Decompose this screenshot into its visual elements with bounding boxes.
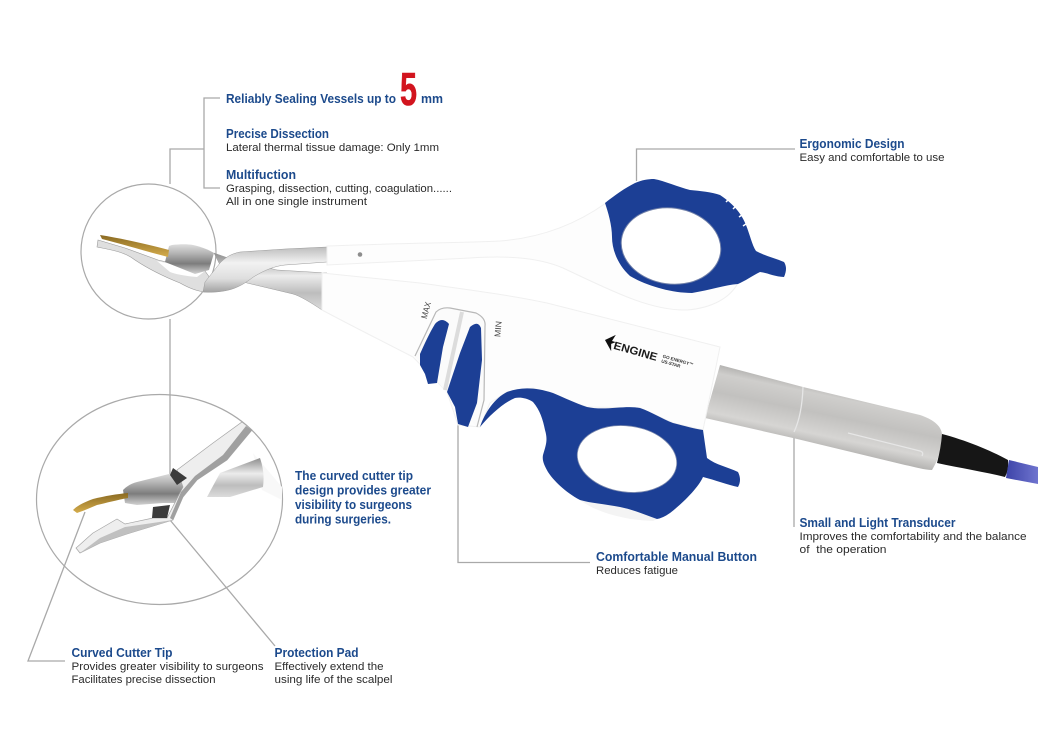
leader line: small circle to large circle bbox=[169, 319, 171, 474]
cutter sleeve bbox=[123, 473, 187, 505]
body line 2: of the operation bbox=[800, 544, 886, 556]
body: Reduces fatigue bbox=[596, 565, 678, 577]
rear shaft bbox=[207, 458, 264, 497]
line 1: The curved cutter tip bbox=[295, 468, 413, 483]
heading: Curved Cutter Tip bbox=[72, 645, 173, 660]
transducer body bbox=[705, 365, 942, 470]
crossing blade bbox=[203, 247, 327, 292]
arm shadow strip bbox=[170, 426, 252, 520]
body line 2: Facilitates precise dissection bbox=[72, 674, 216, 686]
small detail circle bbox=[81, 184, 216, 319]
cutter sleeve bbox=[165, 244, 214, 274]
body: Easy and comfortable to use bbox=[800, 152, 944, 164]
max label: MAX bbox=[419, 300, 433, 320]
button divider bbox=[445, 312, 462, 390]
button panel outline bbox=[415, 308, 485, 427]
line 3: visibility to surgeons bbox=[295, 497, 412, 512]
lower jaw shading bbox=[80, 520, 173, 553]
feature: precise dissection bbox=[226, 126, 439, 154]
upper ring grip ridges bbox=[726, 199, 746, 226]
lower handle blue ring bbox=[480, 388, 740, 519]
feature: small and light transducer bbox=[800, 515, 1026, 556]
body line 2: All in one single instrument bbox=[226, 196, 368, 208]
blue cable bbox=[1006, 460, 1038, 484]
white handle fragment bbox=[253, 453, 282, 500]
heading: Precise Dissection bbox=[226, 126, 329, 141]
leader line: protection pad bbox=[170, 520, 275, 646]
enlarged jaw illustration bbox=[73, 422, 282, 553]
instrument illustration bbox=[97, 179, 1038, 521]
feature: curved cutter statement bbox=[295, 468, 431, 526]
transducer seam and groove bbox=[794, 387, 923, 456]
gold cutter blade bbox=[100, 235, 169, 257]
logo mark bbox=[602, 332, 618, 352]
lower white lobe bbox=[575, 496, 672, 521]
body line 1: Provides greater visibility to surgeons bbox=[72, 661, 264, 673]
leader line: transducer bbox=[793, 432, 795, 527]
body: Lateral thermal tissue damage: Only 1mm bbox=[226, 142, 439, 154]
line 4: during surgeries. bbox=[295, 512, 391, 526]
brand logo bbox=[602, 332, 695, 374]
rubber strain relief bbox=[937, 434, 1008, 477]
body line 2: using life of the scalpel bbox=[274, 674, 392, 686]
lower ring hole bbox=[573, 419, 681, 499]
heading: Protection Pad bbox=[274, 645, 358, 660]
upper handle white shank bbox=[327, 200, 738, 310]
feature: ergonomic design bbox=[800, 136, 944, 164]
leader line: manual button bbox=[458, 404, 590, 562]
leader line: curved cutter tip bbox=[28, 512, 85, 661]
upper handle blue ring bbox=[605, 179, 786, 293]
body line 1: Grasping, dissection, cutting, coagulation...... bbox=[226, 183, 452, 195]
feature: curved cutter tip bbox=[72, 645, 264, 686]
min button bbox=[447, 324, 482, 427]
heading: Ergonomic Design bbox=[800, 136, 905, 151]
steel jaw and arm bbox=[76, 422, 252, 553]
jaw in small circle bbox=[97, 240, 215, 292]
body line 1: Improves the comfortability and the balance bbox=[800, 531, 1026, 543]
lower shaft metal bbox=[214, 253, 327, 310]
min label: MIN bbox=[492, 321, 504, 337]
leader line: top feature bracket bbox=[170, 98, 220, 188]
feature: protection pad bbox=[274, 645, 392, 686]
large detail circle bbox=[36, 394, 282, 604]
logo subtext second line: US-STAR bbox=[661, 359, 682, 369]
leader line: ergonomic design bbox=[636, 149, 795, 181]
pivot screw bbox=[358, 252, 362, 257]
max button bbox=[420, 320, 449, 384]
heading: Multifuction bbox=[226, 167, 296, 182]
lower body white housing bbox=[322, 273, 720, 430]
heading: Small and Light Transducer bbox=[800, 515, 956, 530]
heading: Comfortable Manual Button bbox=[596, 549, 757, 564]
jaw cutout bbox=[157, 261, 205, 277]
protection pad bbox=[152, 468, 187, 518]
logo wordmark: ENGINE bbox=[612, 340, 659, 364]
line 2: design provides greater bbox=[295, 482, 431, 498]
feature: sealing vessels bbox=[226, 63, 443, 115]
upper ring hole bbox=[616, 201, 726, 291]
logo subtext: GO ENERGY™ bbox=[662, 354, 694, 367]
red number 5: 5 bbox=[400, 63, 417, 115]
gold cutter bbox=[73, 493, 128, 513]
heading: Reliably Sealing Vessels up to bbox=[226, 91, 396, 106]
unit: mm bbox=[421, 91, 443, 106]
feature: comfortable manual button bbox=[596, 549, 757, 577]
feature: multifuction bbox=[226, 167, 452, 208]
body line 1: Effectively extend the bbox=[274, 661, 384, 673]
